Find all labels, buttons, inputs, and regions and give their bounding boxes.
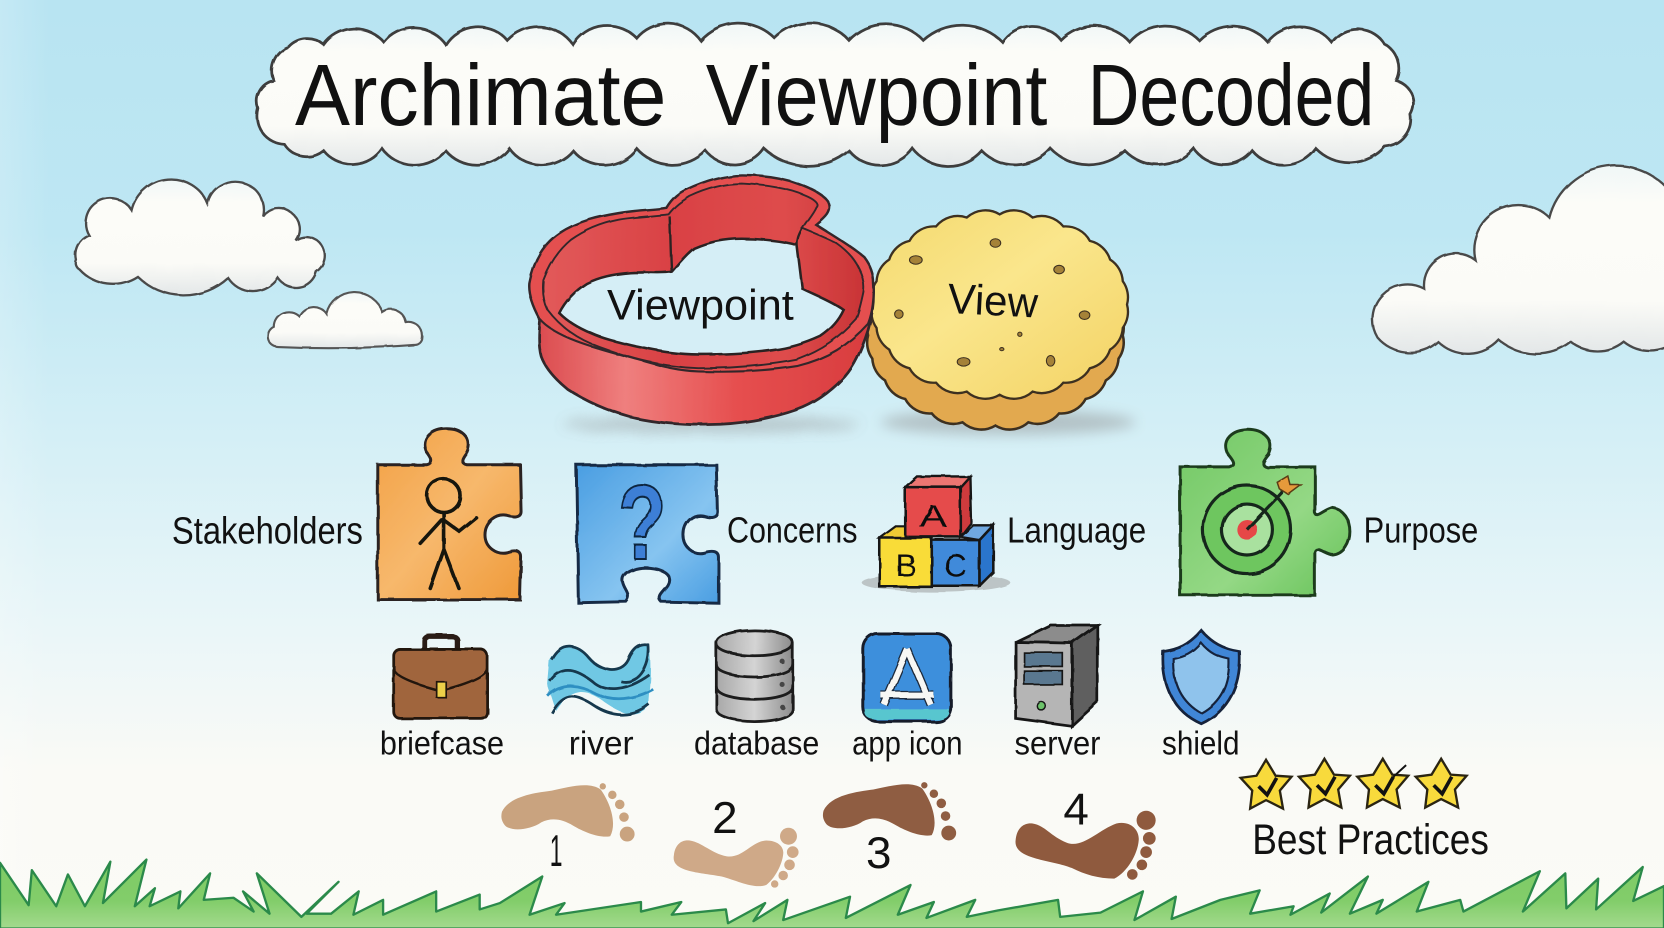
cloud: upper left (76, 179, 325, 295)
label: concerns: Concerns (727, 509, 857, 550)
icon: alphabet blocks (862, 476, 1010, 592)
icon: question mark: ? (618, 464, 666, 582)
puzzle piece: purpose (1180, 430, 1350, 595)
label: server: server (1015, 724, 1101, 761)
best practices stars (1241, 759, 1467, 809)
cutter shadow (562, 416, 860, 433)
block letters: A (919, 497, 948, 533)
star 4 (1416, 759, 1467, 808)
block A (905, 487, 960, 537)
label: river: river (569, 724, 634, 761)
step number 3: 3 (866, 829, 891, 878)
icon: target with arrow (1203, 476, 1301, 574)
label: purpose: Purpose (1364, 509, 1478, 550)
cookie chocolate chips (895, 239, 1090, 366)
cookie shadow (881, 410, 1136, 435)
icon: shield (1163, 630, 1240, 724)
block B (880, 526, 905, 538)
title cloud (257, 23, 1413, 166)
label: shield: shield (1162, 724, 1240, 761)
star 1 (1241, 760, 1292, 809)
blocks shadow (862, 573, 1010, 592)
cookie side (867, 241, 1124, 430)
label: language: Language (1007, 509, 1146, 550)
puzzle piece: concerns (576, 464, 718, 603)
icon labels (380, 724, 1240, 761)
icon: river (548, 645, 654, 715)
title: Decoded (1088, 47, 1374, 144)
icon: app icon (863, 634, 951, 722)
cookie: View (867, 210, 1136, 435)
cutter fold lines (670, 216, 802, 272)
title (295, 47, 1374, 144)
step number 4: 4 (1063, 786, 1089, 835)
icon: alphabet blocks: C (943, 547, 967, 583)
label: briefcase: briefcase (380, 724, 504, 761)
cookie cutter: Viewpoint (529, 175, 874, 433)
block C (960, 525, 993, 540)
footprint 4 (1016, 811, 1156, 880)
view label: View (947, 275, 1039, 327)
step number 1: 1 (550, 827, 562, 876)
cookie top (871, 210, 1128, 399)
step number 2: 2 (712, 794, 738, 843)
cutter inner wall (543, 184, 864, 368)
star 2 (1299, 759, 1350, 808)
star 3 (1357, 759, 1408, 808)
cutter body (529, 175, 874, 425)
label: database: database (694, 724, 819, 761)
icon: stick figure (420, 479, 476, 588)
cloud: right (1372, 166, 1664, 353)
footprint 2 (674, 828, 799, 888)
label: app icon: app icon (852, 724, 963, 761)
title: Viewpoint (706, 47, 1047, 144)
icon: database (716, 630, 793, 722)
label: best practices: Best Practices (1252, 816, 1489, 863)
icon: briefcase (394, 637, 487, 718)
cutter hole (559, 239, 844, 354)
puzzle piece: stakeholders (378, 429, 521, 600)
footprint 1 (501, 783, 635, 842)
viewpoint label: Viewpoint (607, 281, 794, 328)
cutter rim (529, 175, 874, 372)
footprint 3 (823, 782, 956, 840)
label: stakeholders: Stakeholders (172, 509, 363, 552)
icon: server (1016, 625, 1097, 726)
icon: alphabet blocks: B (896, 547, 917, 583)
cloud: small left (268, 292, 422, 348)
grass (0, 860, 1664, 928)
title: Archimate (295, 47, 666, 144)
